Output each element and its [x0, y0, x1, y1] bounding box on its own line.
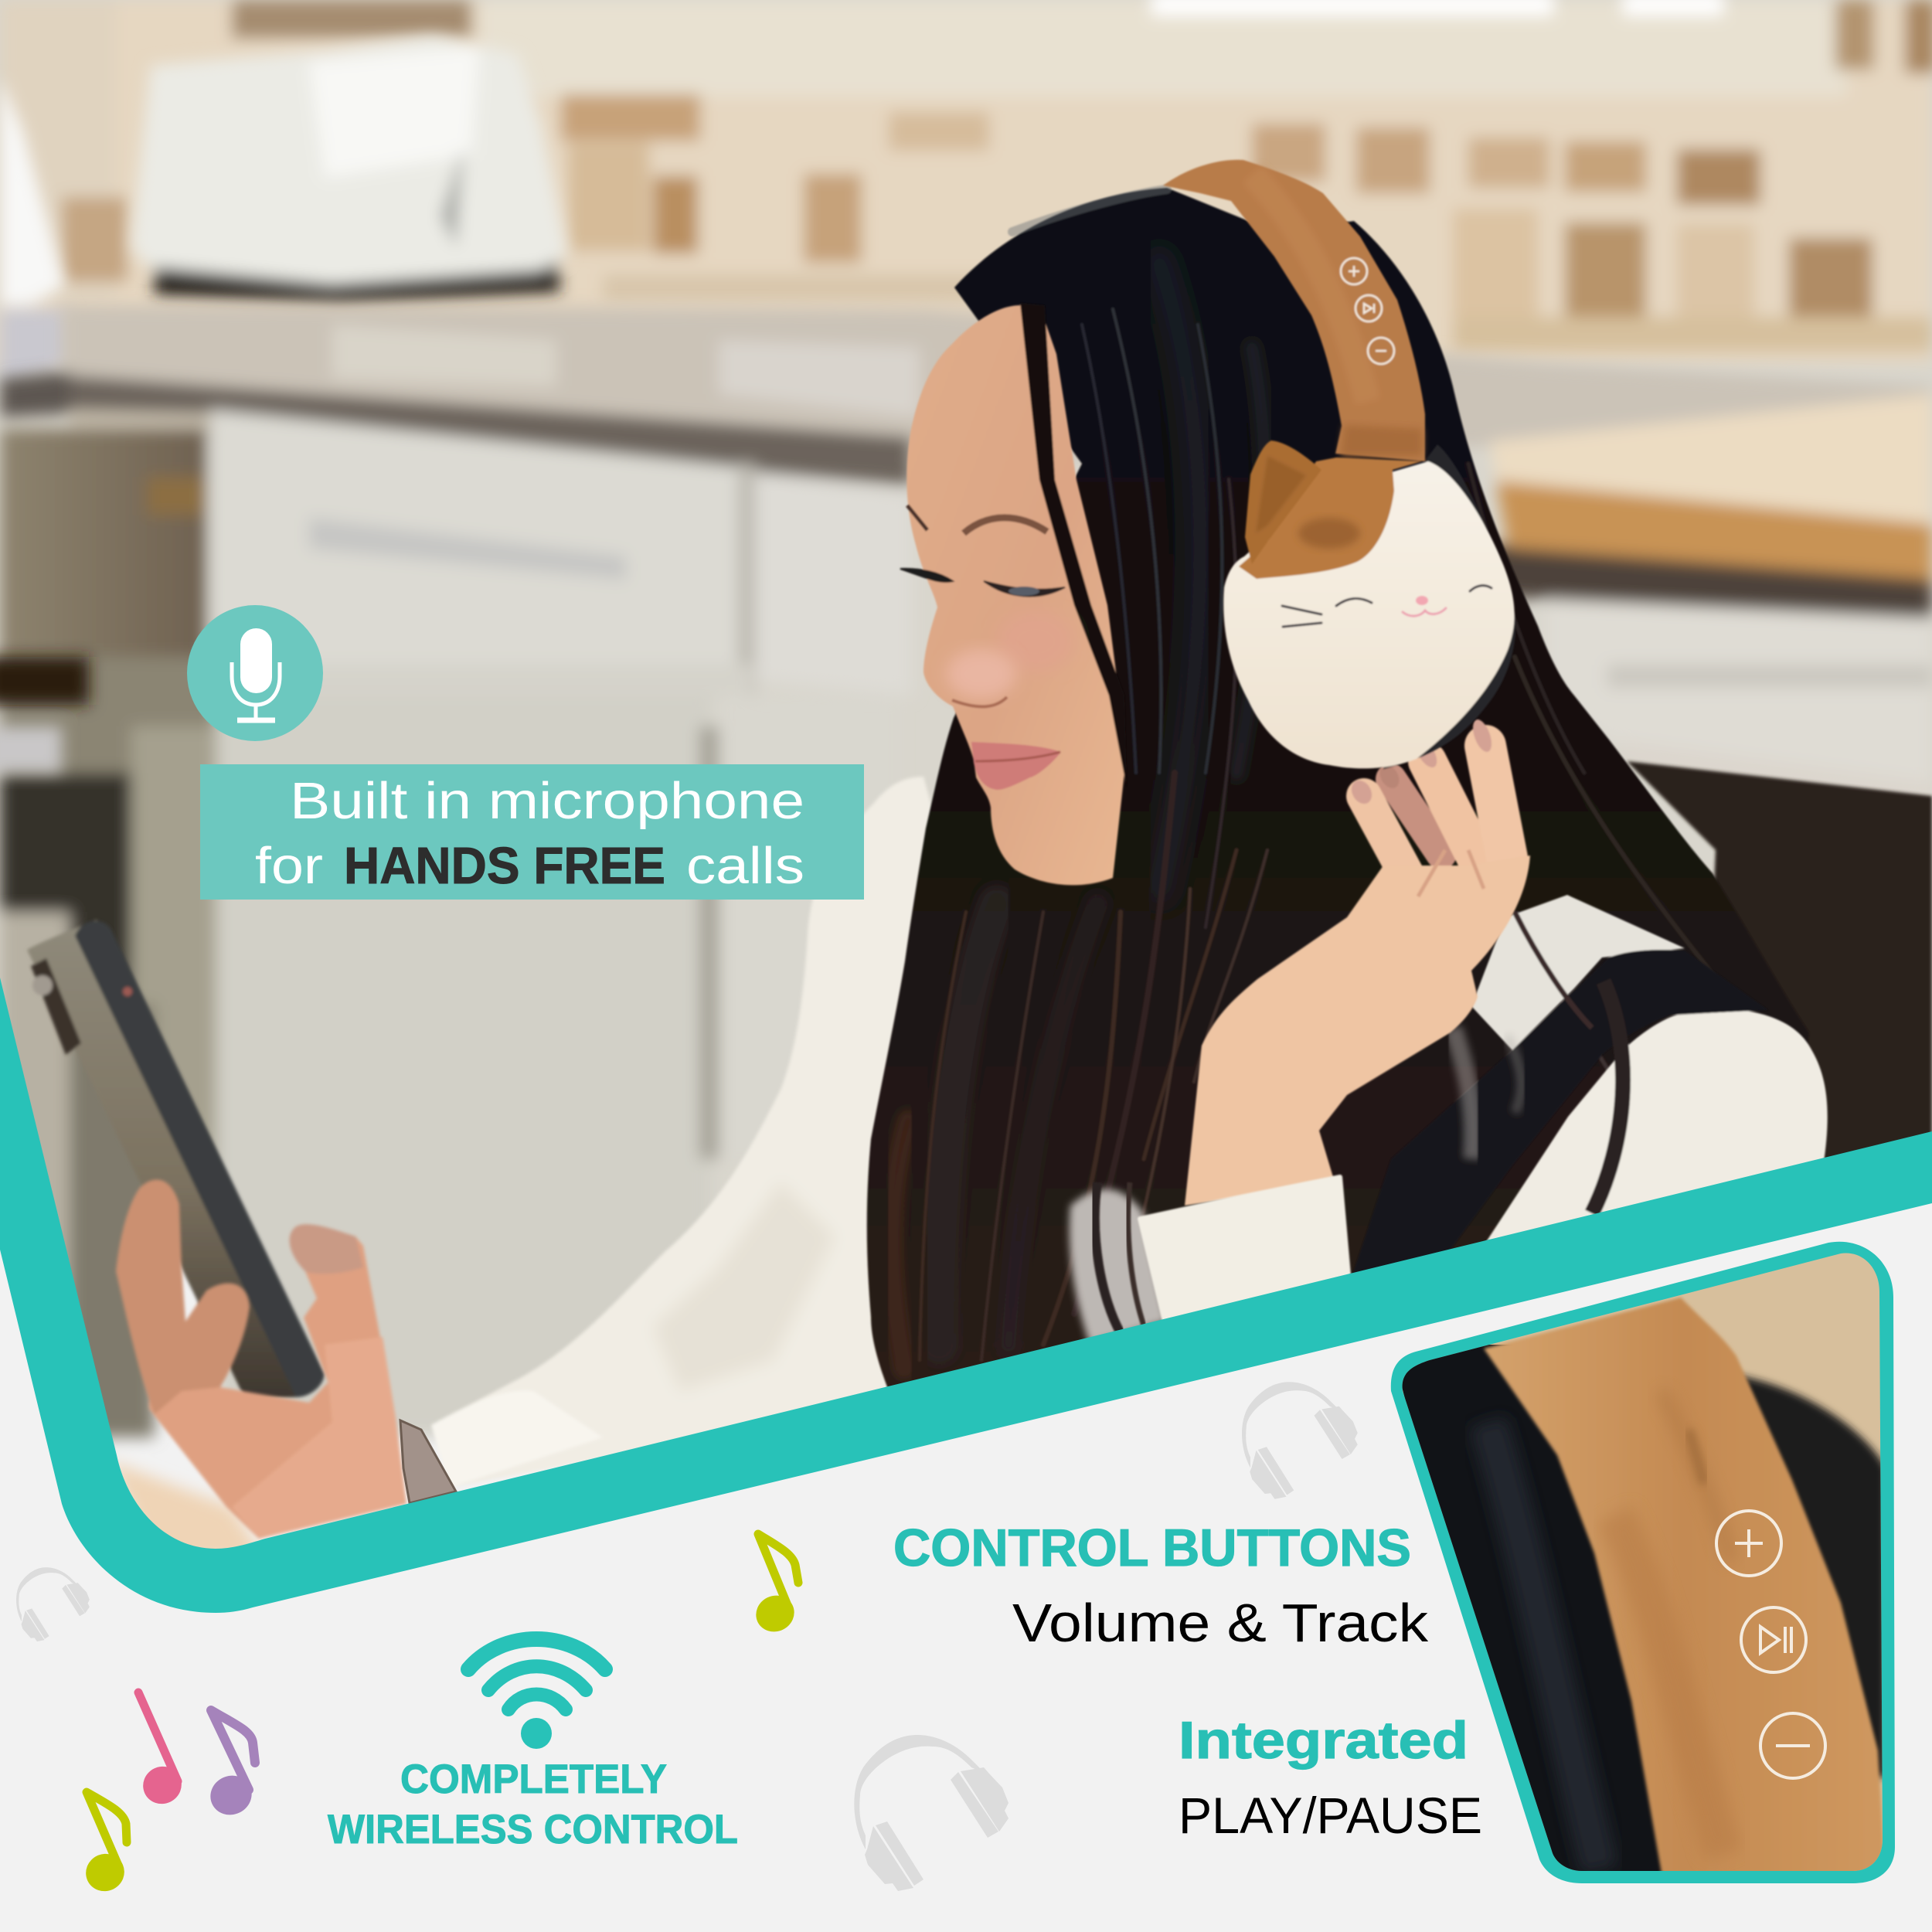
label: control buttons volume and track	[893, 1519, 1429, 1653]
inset embroidered buttons	[1716, 1511, 1825, 1778]
eyes	[984, 581, 1065, 597]
left hand holding phone	[116, 1180, 406, 1539]
cat ear	[1245, 440, 1321, 564]
label: completely wireless control: COMPLETELY	[400, 1757, 667, 1802]
icon: lime music note top	[750, 1534, 800, 1638]
icon: microphone	[232, 628, 280, 720]
back ear and cushion	[1383, 444, 1515, 769]
cat face	[1223, 461, 1515, 768]
label: control buttons volume and track: Volume & Track	[1012, 1593, 1429, 1653]
light lower panel	[0, 1203, 1932, 1932]
face	[900, 303, 1127, 885]
phone	[27, 920, 325, 1399]
label: integrated play pause	[1179, 1711, 1482, 1844]
woman wearing cat headphones	[27, 160, 1828, 1539]
icon: wifi	[468, 1639, 605, 1749]
control buttons on band	[1341, 258, 1394, 364]
blurred counter, cabinets and table	[0, 305, 1932, 1561]
sleeve cuff	[1140, 1177, 1349, 1318]
chair back	[1627, 761, 1932, 1206]
eyebrows	[964, 518, 1047, 533]
blurred dark and white shelf items	[0, 657, 89, 773]
headband	[1163, 160, 1425, 461]
inset background	[1402, 1253, 1883, 1871]
microphone badge	[187, 605, 323, 741]
label: integrated play pause: Integrated	[1179, 1711, 1468, 1770]
callout: built in microphone: for	[255, 837, 323, 895]
cat earmuff headphones	[1163, 160, 1515, 769]
label: integrated play pause: PLAY/PAUSE	[1179, 1787, 1482, 1844]
fingers	[1364, 746, 1507, 889]
collar and right shoulder of sweater	[1352, 895, 1828, 1275]
panel: control buttons close-up inset	[1391, 1236, 1901, 1886]
palm and thumb	[149, 1224, 406, 1539]
cheek shading and nose	[997, 611, 1074, 672]
fingers on phone	[116, 1180, 250, 1414]
icon: large headphones bottom	[854, 1735, 1009, 1891]
wristwatch	[400, 1420, 456, 1503]
hair strands	[892, 189, 1731, 1368]
callout: built in microphone: calls	[686, 837, 804, 895]
callout: built in microphone: HANDS FREE	[344, 837, 665, 895]
callout: built in microphone	[200, 764, 864, 900]
callout: built in microphone: Built in microphone	[290, 772, 804, 830]
label: completely wireless control: WIRELESS CONTROL	[328, 1807, 738, 1852]
front hair strand	[1020, 303, 1127, 788]
white sweater seen through hair	[1070, 1182, 1167, 1345]
blurred tiled wall	[0, 0, 1932, 363]
brown patch	[1239, 457, 1422, 579]
face stitching	[1282, 586, 1492, 627]
icon: small headphones left	[16, 1567, 90, 1641]
lips	[971, 742, 1061, 790]
blurred kettle and toaster	[0, 35, 568, 386]
icon: purple music note	[204, 1710, 258, 1821]
right hand and arm	[1185, 717, 1530, 1206]
inset headband fur	[1484, 1298, 1886, 1878]
icon: pink music note	[137, 1692, 188, 1810]
left sweater sleeve	[431, 777, 966, 1488]
long black hair	[867, 188, 1809, 1391]
label: control buttons volume and track: CONTROL BUTTONS	[893, 1519, 1411, 1577]
inset hair	[1743, 1371, 1883, 1784]
icon: lime music note bottom	[80, 1792, 131, 1897]
icon: headphones near control buttons	[1242, 1382, 1358, 1499]
label: completely wireless control	[328, 1757, 738, 1852]
teal frame band	[0, 978, 1932, 1932]
